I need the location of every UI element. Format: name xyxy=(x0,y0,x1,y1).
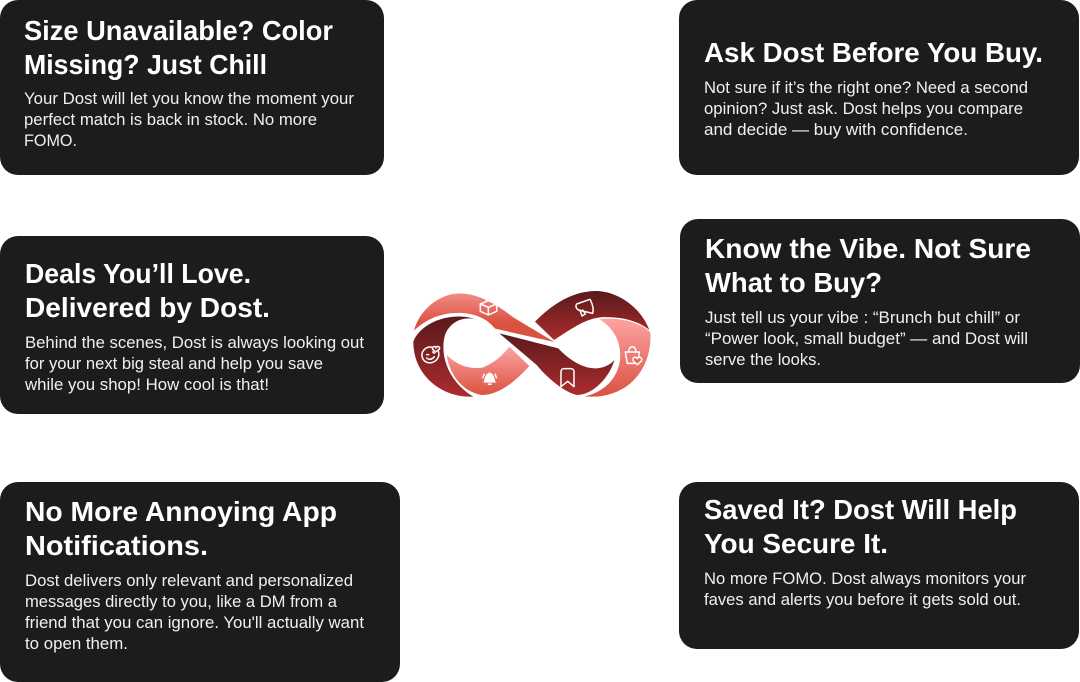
segment: top right dark xyxy=(535,291,649,340)
text: deals body: while you shop! How cool is that! xyxy=(24,375,269,394)
heading: ask dost: Ask Dost Before You Buy. xyxy=(704,37,1043,68)
heading: deals xyxy=(25,258,270,323)
text: size unavailable body: perfect match is back in stock. No more xyxy=(24,110,317,129)
text: saved it body: faves and alerts you before it gets sold out. xyxy=(704,590,1021,609)
heading: size unavailable: Size Unavailable? Color xyxy=(24,15,333,46)
text: know the vibe body: serve the looks. xyxy=(705,350,821,369)
infinity loop diagram xyxy=(413,291,651,397)
heading: deals: Deals You’ll Love. xyxy=(25,258,251,289)
panel: ask dost xyxy=(679,0,1079,175)
panel: know the vibe xyxy=(680,219,1080,383)
panel: size unavailable xyxy=(0,0,384,175)
segment: top left salmon xyxy=(414,293,554,342)
text: ask dost body xyxy=(704,78,1028,139)
text: saved it body xyxy=(704,569,1026,609)
text: notifications body: to open them. xyxy=(25,634,128,653)
segment: bottom left pink xyxy=(447,347,529,395)
icon: bookmark xyxy=(561,369,574,387)
text: notifications body: messages directly to you, like a DM from a xyxy=(25,592,338,611)
icon: bell xyxy=(482,373,497,385)
text: know the vibe body xyxy=(705,308,1028,369)
text: know the vibe body: Just tell us your vibe : “Brunch but chill” or xyxy=(705,308,1020,327)
text: deals body xyxy=(24,333,364,394)
heading: saved it: You Secure It. xyxy=(704,528,888,559)
heading: notifications xyxy=(25,496,337,561)
heading: notifications: Notifications. xyxy=(25,530,208,561)
heading: size unavailable xyxy=(24,15,333,80)
segment: left dark xyxy=(413,317,476,397)
heading: know the vibe xyxy=(705,233,1031,298)
text: ask dost body: and decide — buy with confidence. xyxy=(704,120,968,139)
text: deals body: Behind the scenes, Dost is always looking out xyxy=(25,333,364,352)
segment: center dark xyxy=(499,333,614,395)
text: deals body: for your next big steal and help you save xyxy=(25,354,323,373)
text: size unavailable body xyxy=(24,89,354,150)
heading: notifications: No More Annoying App xyxy=(25,496,337,527)
heading: size unavailable: Missing? Just Chill xyxy=(24,49,267,80)
heading: know the vibe: What to Buy? xyxy=(705,267,882,298)
text: notifications body xyxy=(25,571,364,653)
text: ask dost body: Not sure if it’s the right one? Need a second xyxy=(704,78,1028,97)
heading: know the vibe: Know the Vibe. Not Sure xyxy=(705,233,1031,264)
segment: right pink xyxy=(584,319,651,397)
text: notifications body: friend that you can ignore. You'll actually want xyxy=(25,613,364,632)
text: notifications body: Dost delivers only relevant and personalized xyxy=(25,571,353,590)
text: saved it body: No more FOMO. Dost always monitors your xyxy=(704,569,1026,588)
heading: saved it xyxy=(704,494,1017,559)
icon: megaphone xyxy=(576,299,593,316)
heading: saved it: Saved It? Dost Will Help xyxy=(704,494,1017,525)
icon: shopping bag with heart xyxy=(625,347,642,365)
panel: notifications xyxy=(0,482,400,682)
text: size unavailable body: Your Dost will let you know the moment your xyxy=(24,89,354,108)
icon: smile with heart xyxy=(422,346,440,363)
text: size unavailable body: FOMO. xyxy=(24,131,77,150)
panel: deals xyxy=(0,236,384,414)
icon: box xyxy=(480,296,497,315)
text: ask dost body: opinion? Just ask. Dost helps you compare xyxy=(704,99,1023,118)
heading: deals: Delivered by Dost. xyxy=(25,292,270,323)
panel: saved it xyxy=(679,482,1079,649)
text: know the vibe body: “Power look, small budget” — and Dost will xyxy=(705,329,1028,348)
